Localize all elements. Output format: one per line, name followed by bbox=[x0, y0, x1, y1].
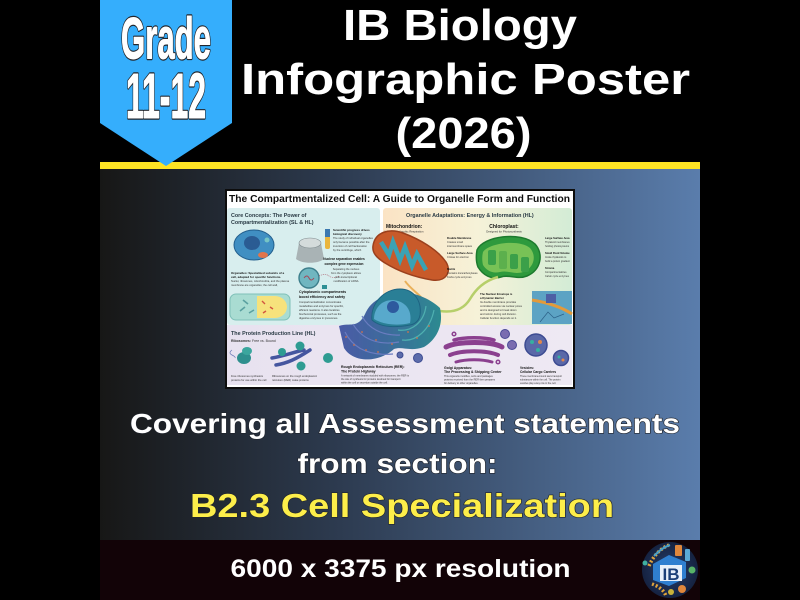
text: ribosome captions: Free ribosomes synthesize bbox=[231, 374, 264, 378]
text: cytoplasmic compartments bbox=[299, 290, 346, 320]
mitochondrion labels: intermembrane space bbox=[447, 244, 473, 248]
text: scientific progress bbox=[333, 228, 374, 252]
preview title: The Compartmentalized Cell: A Guide to Organelle Form and Function bbox=[229, 194, 570, 205]
text: scientific progress: only became possible after the bbox=[333, 240, 370, 244]
chloroplast labels: Stroma bbox=[545, 266, 555, 270]
text: vesicles: Cellular Cargo Carriers bbox=[520, 370, 556, 374]
icon: free ribosome bbox=[230, 347, 252, 364]
logo: IB badge: IB bbox=[662, 565, 680, 584]
mitochondrion labels: Matrix bbox=[447, 267, 456, 271]
text: nuclear separation: complex gene expression bbox=[325, 262, 364, 266]
text: ribosome captions: Ribosomes on the rough endoplasmic bbox=[272, 374, 318, 378]
text: scientific progress: biological discovery bbox=[333, 232, 362, 236]
text: cytoplasmic compartments: Cytoplasmic compartments bbox=[299, 290, 346, 294]
text: organelles definition: cell, adapted for specific functions. bbox=[231, 275, 281, 279]
text: golgi: Golgi Apparatus: bbox=[444, 366, 472, 370]
text: organelles definition bbox=[231, 271, 290, 287]
panel: organelle adaptations: Designed for Photosynthesis bbox=[486, 230, 522, 234]
text: cytoplasmic compartments: efficient reactions. It also localizes bbox=[299, 308, 340, 312]
panel: core concepts: Core Concepts: The Power of bbox=[231, 213, 307, 219]
text: vesicles bbox=[520, 366, 562, 385]
panel: organelle adaptations: Organelle Adaptations: Energy & Information (HL) bbox=[406, 213, 534, 219]
chloroplast labels bbox=[545, 236, 570, 278]
mitochondrion label: Mitochondrion: bbox=[386, 224, 423, 230]
subtitle: coverage statement bbox=[130, 408, 680, 479]
text: golgi: This organelle modifies, sorts and packages bbox=[444, 375, 494, 378]
text: nuclear envelope: and reform during cell division. bbox=[480, 312, 517, 316]
text: ribosome captions: proteins for use within the cell bbox=[231, 378, 267, 382]
icon: cytoplasmic compartments bbox=[230, 294, 290, 320]
connector: mitochondrion stem bbox=[405, 281, 421, 297]
panel: core concepts: Compartmentalization (SL & HL) bbox=[231, 220, 314, 226]
footer: resolution: 6000 x 3375 px resolution bbox=[230, 555, 570, 583]
icon: animal cell bbox=[234, 230, 274, 260]
panel: protein production line: Ribosomes: Free vs. Bound bbox=[231, 339, 276, 343]
text: scientific progress: invention of cell fractionation bbox=[333, 244, 367, 248]
mitochondrion labels bbox=[447, 236, 478, 279]
mitochondrion labels: Double Membrane bbox=[447, 236, 472, 240]
text: nuclear separation: Separating the nucleus bbox=[333, 267, 360, 271]
text: nuclear separation: post-transcriptional bbox=[335, 275, 357, 279]
chloroplast labels: Inside thylakoids to bbox=[545, 256, 567, 259]
chloroplast labels: build a proton gradient bbox=[545, 260, 570, 263]
icon: vesicles bbox=[500, 330, 568, 366]
title: (2026) bbox=[396, 109, 532, 158]
text: ribosome captions bbox=[231, 374, 318, 382]
icon: golgi apparatus bbox=[446, 332, 502, 364]
text: nuclear separation: modification of mRNA bbox=[333, 279, 359, 283]
chloroplast label: Chloroplast: bbox=[489, 224, 519, 230]
icon: nuclear pore bbox=[532, 291, 572, 324]
chloroplast labels: Large Surface Area bbox=[545, 236, 570, 240]
text: RER: A network of membranes studded with ribosomes; the RER is bbox=[341, 374, 410, 378]
chloroplast labels: Compartmentalizes bbox=[545, 271, 567, 274]
text: golgi: for delivery to other organelles. bbox=[444, 382, 479, 385]
text: nuclear envelope: Its double membrane provides bbox=[480, 300, 517, 304]
text: golgi bbox=[444, 366, 502, 385]
text: nuclear envelope: Cellular function depends on it. bbox=[480, 316, 517, 320]
mitochondrion labels: Creates small bbox=[447, 240, 463, 244]
icon: nucleus gene expression bbox=[299, 268, 339, 289]
text: RER: The Protein Highway bbox=[341, 370, 376, 374]
subtitle: section name: B2.3 Cell Specialization bbox=[190, 487, 614, 524]
mitochondrion labels: Large Surface Area bbox=[447, 251, 473, 255]
text: RER: within the cell or secretion outside the cell. bbox=[341, 382, 388, 384]
mitochondrion labels: Cristae for electron bbox=[447, 255, 469, 259]
panel: protein production line: The Protein Production Line (HL) bbox=[231, 331, 316, 337]
mitochondrion labels: Krebs cycle enzymes bbox=[447, 275, 472, 279]
text: nuclear envelope: a Dynamic Barrier bbox=[480, 296, 505, 300]
illustration: central cell with nucleus and ER bbox=[339, 289, 441, 362]
stem connector bbox=[440, 277, 498, 312]
title bbox=[241, 1, 690, 158]
icon: centrifuge bbox=[296, 229, 330, 263]
text: nuclear envelope bbox=[480, 292, 523, 320]
text: organelles definition: Nuclei, ribosomes, mitochondria, and the plasma bbox=[231, 279, 290, 283]
text: nuclear envelope: and is designed to break down bbox=[480, 308, 517, 312]
text: organelles definition: membrane are organelles; the cell wall, bbox=[231, 283, 278, 287]
panel: protein production line bbox=[227, 325, 572, 385]
text: scientific progress: by the centrifuge, which bbox=[333, 248, 362, 252]
title: Infographic Poster bbox=[241, 55, 690, 104]
text: vesicles: vesicles play a key role in the cell. bbox=[520, 382, 556, 385]
subtitle: coverage statement: from section: bbox=[298, 448, 498, 479]
text: cytoplasmic compartments: metabolites and enzymes for specific, bbox=[299, 304, 344, 308]
text: RER: the site of synthesis for proteins destined for transport bbox=[341, 378, 401, 381]
badge: grade level: Grade bbox=[121, 6, 211, 72]
title: IB Biology bbox=[343, 1, 578, 50]
text: ribosome captions: reticulum (RER) make proteins bbox=[272, 378, 309, 382]
icon: chloroplast bbox=[476, 236, 540, 278]
gradient background panel bbox=[100, 169, 700, 540]
text: vesicles: Vesicles: bbox=[520, 366, 534, 370]
text: scientific progress: Scientific progress drives bbox=[333, 228, 370, 232]
badge: grade level: Grade bbox=[121, 6, 211, 72]
chloroplast labels: Thylakoid membranes bbox=[545, 241, 570, 244]
text: RER: Rough Endoplasmic Reticulum (RER): bbox=[341, 365, 405, 369]
text: golgi: The Processing & Shipping Center bbox=[444, 370, 502, 374]
text: organelles definition: Organelles: Specialized subunits of a bbox=[231, 271, 285, 275]
text: scientific progress: The study of individual organelles bbox=[333, 236, 374, 240]
text: nuclear envelope: The Nuclear Envelope is bbox=[480, 292, 513, 296]
text: nuclear separation: Nuclear separation enables bbox=[323, 257, 365, 261]
mitochondrion labels: Contains trancarboxylases bbox=[447, 271, 478, 275]
text: cytoplasmic compartments: boost efficiency and safety bbox=[299, 295, 345, 299]
footer band bbox=[100, 540, 700, 600]
panel: organelle adaptations: Adapted for Aerobic Respiration bbox=[384, 230, 424, 234]
panel: organelle adaptations bbox=[373, 208, 572, 325]
text: nuclear separation: from the cytoplasm allows bbox=[331, 271, 362, 275]
text: nuclear envelope: controlled access via nuclear pores bbox=[480, 304, 523, 308]
chloroplast labels: Small Fluid Volume bbox=[545, 251, 570, 255]
logo: IB badge bbox=[642, 542, 698, 598]
yellow divider bar bbox=[100, 162, 700, 169]
text: cytoplasmic compartments: biochemical processes, such as the bbox=[299, 312, 342, 316]
badge: grade level: 11-12 bbox=[126, 60, 206, 132]
badge: grade level bbox=[100, 0, 232, 166]
icon: mitochondrion bbox=[373, 231, 448, 280]
text: RER bbox=[341, 365, 410, 384]
chloroplast labels: Calvin cycle enzymes bbox=[545, 275, 570, 278]
text: cytoplasmic compartments: Compartmentalization concentrates bbox=[299, 300, 342, 304]
text: cytoplasmic compartments: digestive enzymes in lysosomes. bbox=[299, 316, 338, 320]
text: vesicles: substances within the cell. The protein bbox=[520, 378, 561, 382]
badge: grade level: 11-12 bbox=[126, 60, 206, 132]
text: vesicles: These membrane-bound sacs transport bbox=[520, 375, 562, 378]
subtitle: coverage statement: Covering all Assessment statements bbox=[130, 408, 680, 439]
text: golgi: proteins received from the RER then prepares bbox=[444, 378, 496, 382]
chloroplast labels: holding photosystems bbox=[545, 245, 570, 248]
panel: core concepts bbox=[227, 208, 380, 325]
text: nuclear separation bbox=[323, 257, 365, 283]
icon: bound ribosomes on ER bbox=[272, 342, 333, 370]
embedded infographic preview bbox=[225, 189, 575, 389]
